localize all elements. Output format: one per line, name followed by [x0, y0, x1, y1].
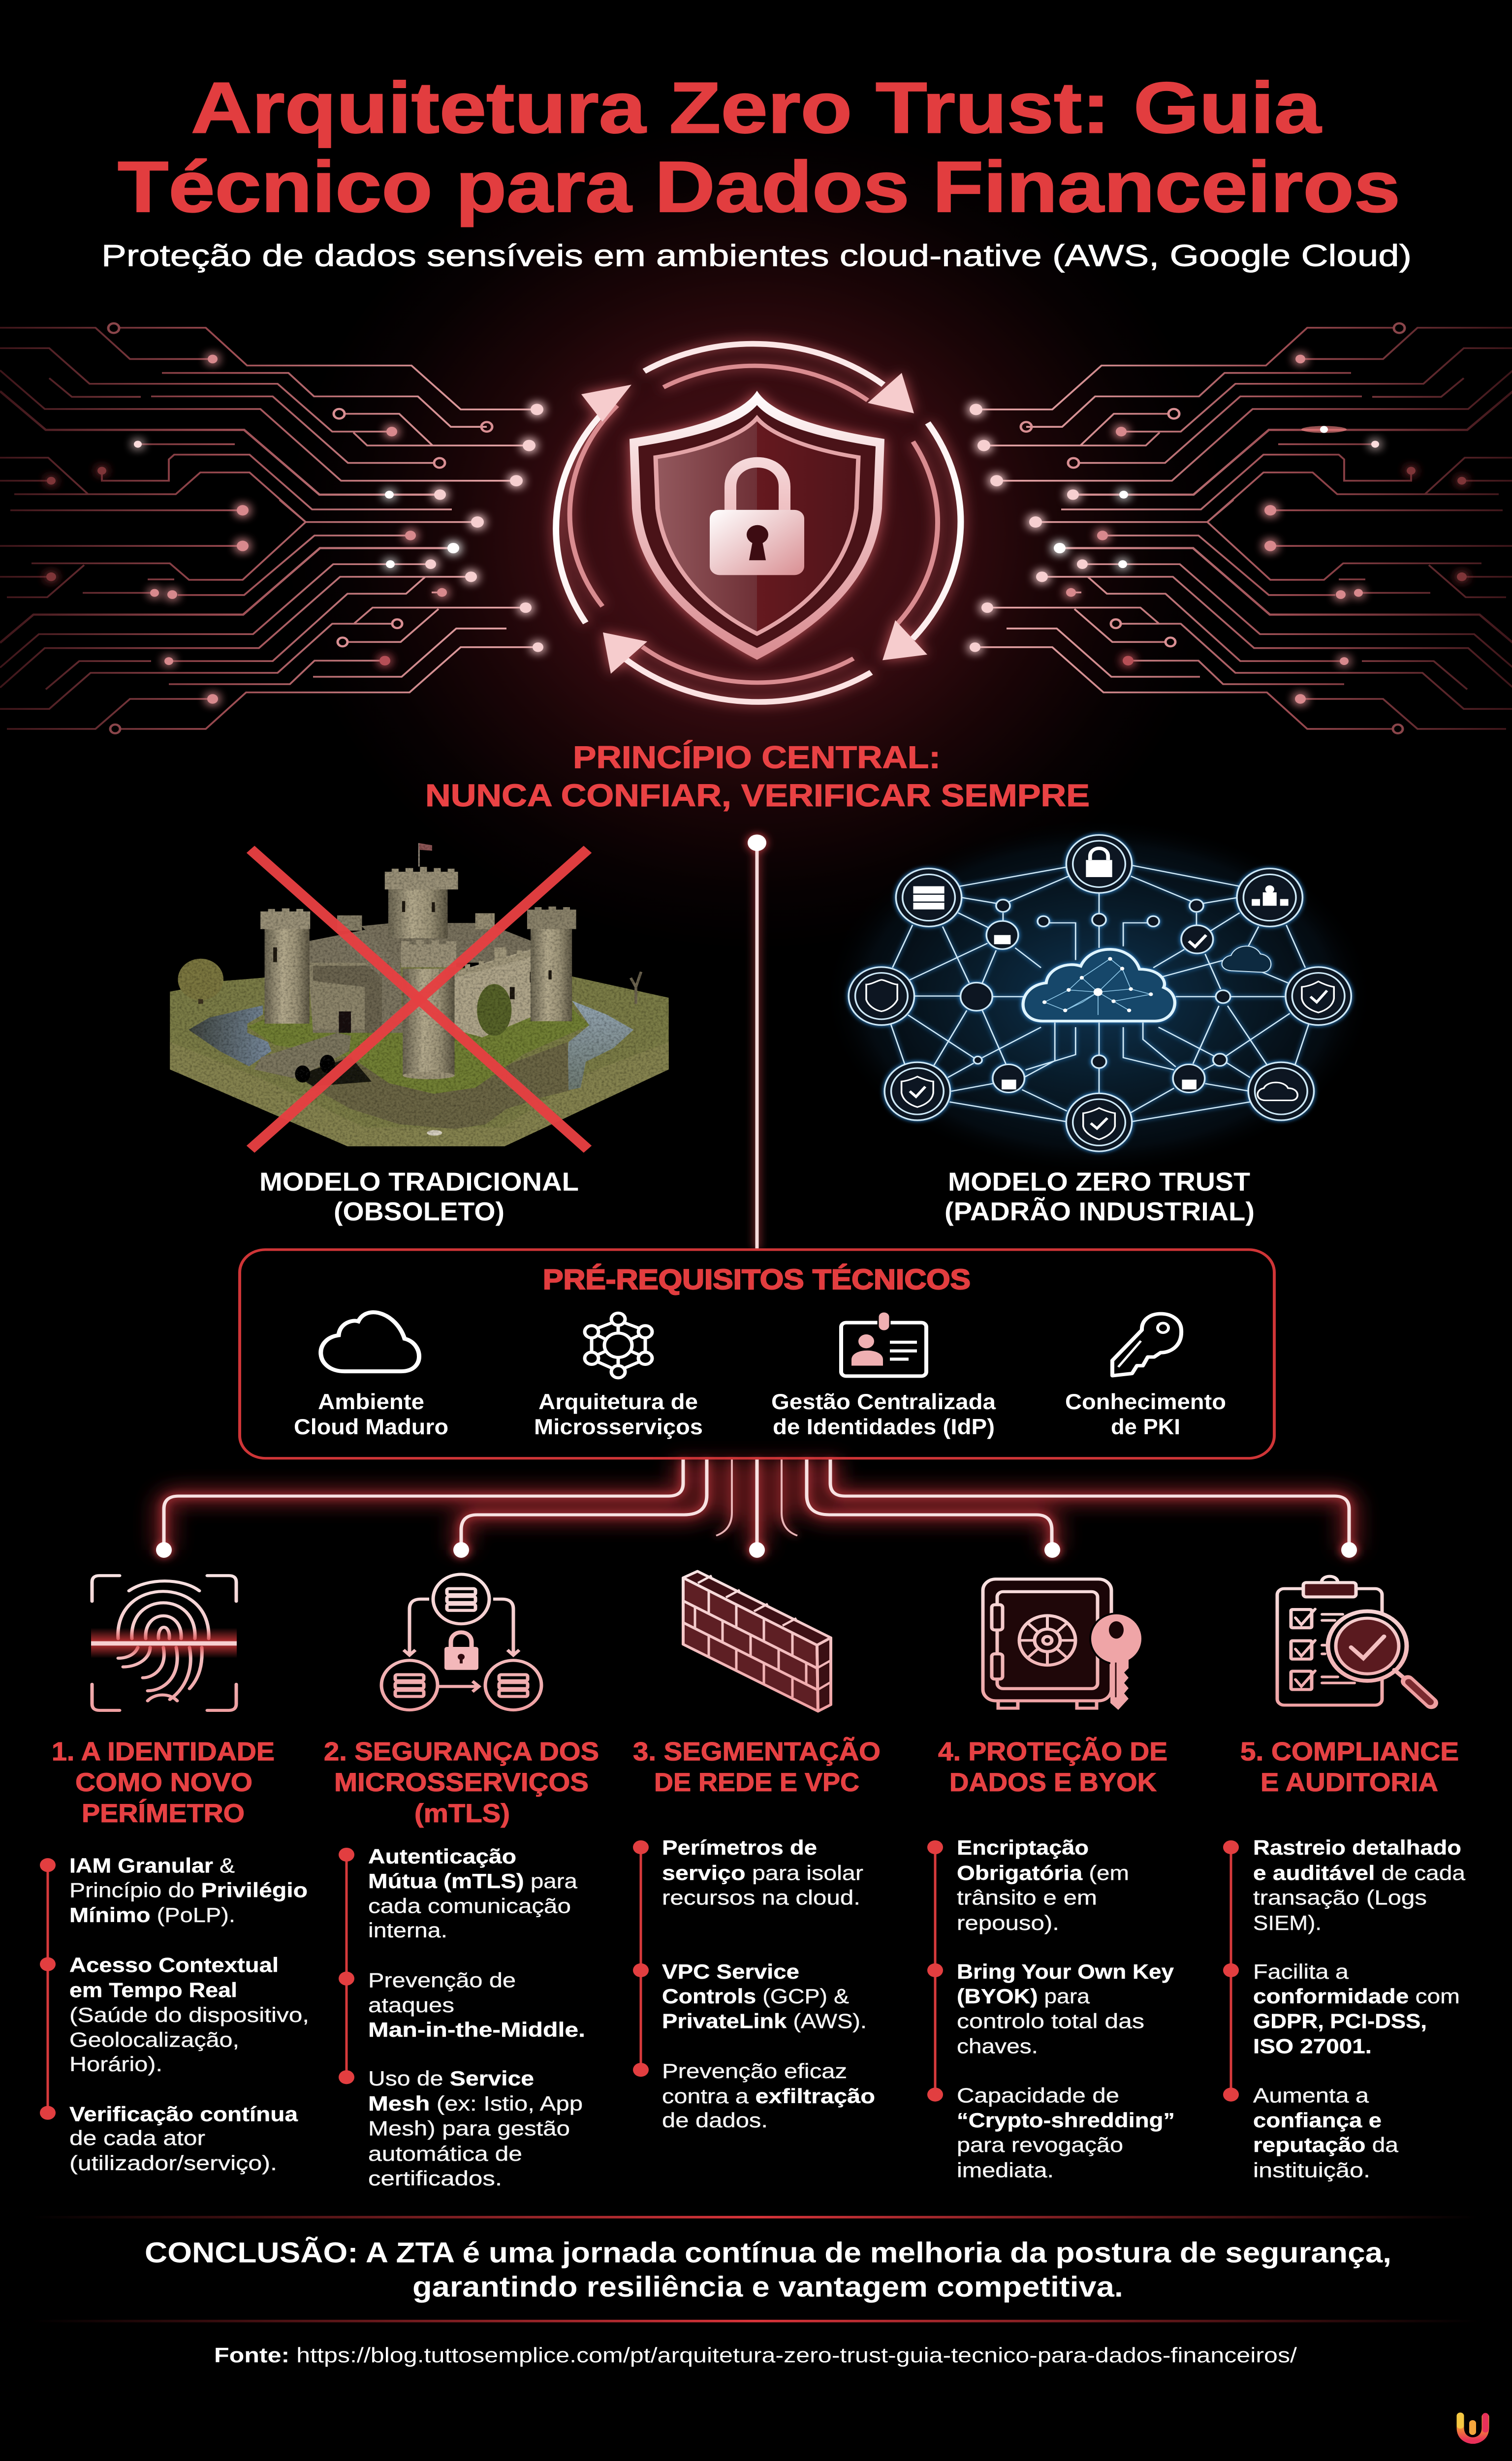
- central principle: PRINCÍPIO CENTRAL:: [573, 740, 941, 775]
- bullet text: [368, 1845, 585, 2190]
- bullet text: Uso de Service: [368, 2068, 534, 2090]
- bullet text: ataques: [368, 1994, 454, 2017]
- heading: [938, 1737, 1167, 1797]
- bullet text: Encriptação: [957, 1837, 1089, 1859]
- bullet text: para revogação: [957, 2134, 1123, 2156]
- red cross: [251, 850, 588, 1149]
- central principle: NUNCA CONFIAR, VERIFICAR SEMPRE: [425, 779, 1090, 813]
- icon: safe and key: [983, 1579, 1142, 1710]
- bullet text: contra a exfiltração: [662, 2085, 875, 2108]
- big nodes: [849, 835, 1351, 1151]
- bullet text: imediata.: [957, 2159, 1054, 2182]
- label: zero trust model: MODELO ZERO TRUST: [948, 1167, 1250, 1196]
- heading: COMO NOVO: [75, 1767, 252, 1797]
- bullet text: Man-in-the-Middle.: [368, 2019, 585, 2041]
- item: PKI knowledge: Conhecimento: [1065, 1389, 1226, 1414]
- bullet text: trânsito e em: [957, 1887, 1097, 1909]
- item: identity management: de Identidades (IdP): [773, 1415, 995, 1439]
- bullet text: PrivateLink (AWS).: [662, 2010, 867, 2033]
- bullet text: interna.: [368, 1919, 447, 1942]
- bullet text: controlo total das: [957, 2010, 1144, 2033]
- subtitle: Proteção de dados sensíveis em ambientes cloud-native (AWS, Google Cloud): [101, 238, 1412, 273]
- heading: [52, 1737, 275, 1828]
- heading: [633, 1737, 881, 1797]
- central shield with rotating arrows: [556, 344, 961, 702]
- bullet text: (utilizador/serviço).: [69, 2152, 277, 2175]
- icon: fingerprint scan: [91, 1576, 237, 1710]
- bullet text: Acesso Contextual: [69, 1954, 279, 1977]
- conclusion: CONCLUSÃO: A ZTA é uma jornada contínua de melhoria da postura de segurança,: [145, 2236, 1391, 2269]
- refresh rings: [556, 344, 961, 702]
- conclusion: garantindo resiliência e vantagem competitiva.: [412, 2272, 1123, 2303]
- bullet text: Mesh) para gestão: [368, 2117, 570, 2140]
- bullet text: Princípio do Privilégio: [69, 1879, 308, 1902]
- padlock: [710, 462, 804, 575]
- icon: lock top: [1086, 849, 1112, 877]
- bullet text: ISO 27001.: [1253, 2035, 1372, 2058]
- item: identity management: Gestão Centralizada: [771, 1389, 996, 1414]
- source: Fonte: https://blog.tuttosemplice.com/pt/arquitetura-zero-trust-guia-tecnico-para-dados-financeiros/: [214, 2343, 1297, 2367]
- logo: [1460, 2416, 1485, 2440]
- bullet text: reputação da: [1253, 2134, 1398, 2156]
- bullet text: Verificação contínua: [69, 2103, 298, 2126]
- title: Arquitetura Zero Trust: Guia: [191, 67, 1322, 148]
- bullet text: VPC Service: [662, 1960, 799, 1983]
- bullet text: Autenticação: [368, 1845, 516, 1868]
- heading: DE REDE E VPC: [654, 1767, 859, 1797]
- icon: mTLS servers: [381, 1575, 541, 1710]
- bullet text: Mútua (mTLS) para: [368, 1870, 577, 1893]
- traditional castle model: [170, 843, 669, 1226]
- heading: E AUDITORIA: [1260, 1767, 1438, 1797]
- item: PKI knowledge: de PKI: [1111, 1415, 1180, 1439]
- item: PKI knowledge: [1065, 1314, 1226, 1439]
- icon: clipboard and magnifier: [1277, 1577, 1431, 1705]
- bullet text: Rastreio detalhado: [1253, 1837, 1461, 1859]
- heading: DADOS E BYOK: [949, 1767, 1157, 1797]
- pillar 4: data protection: [927, 1579, 1175, 2182]
- bullet text: Facilita a: [1253, 1960, 1349, 1983]
- bullet text: cada comunicação: [368, 1895, 571, 1918]
- pillar 2: microservices mTLS: [324, 1575, 599, 2190]
- bullet text: serviço para isolar: [662, 1862, 863, 1885]
- heading: (mTLS): [414, 1798, 510, 1828]
- bullet text: (BYOK) para: [957, 1986, 1090, 2008]
- bullet text: recursos na cloud.: [662, 1887, 860, 1909]
- bullet text: Prevenção eficaz: [662, 2060, 847, 2082]
- bullet timeline: [927, 1840, 943, 2102]
- item: identity management: [771, 1312, 996, 1439]
- bullet text: conformidade com: [1253, 1986, 1460, 2008]
- bullet text: e auditável de cada: [1253, 1862, 1465, 1885]
- bullet timeline: [1223, 1840, 1239, 2102]
- item: cloud environment: Ambiente: [318, 1389, 424, 1414]
- bullet text: Controls (GCP) &: [662, 1986, 849, 2008]
- heading: prerequisites: PRÉ-REQUISITOS TÉCNICOS: [543, 1263, 971, 1295]
- bullet text: confiança e: [1253, 2109, 1382, 2132]
- icon: cloud network: [849, 835, 1351, 1151]
- bullet text: “Crypto-shredding”: [957, 2109, 1175, 2132]
- central principle: [425, 740, 1090, 813]
- item: microservices: Arquitetura de: [538, 1389, 698, 1414]
- icon: castle with moat: [170, 843, 669, 1146]
- bullet timeline: [633, 1840, 649, 2077]
- circuit board left: [0, 323, 543, 733]
- bullet text: instituição.: [1253, 2159, 1370, 2182]
- small cloud: [1222, 946, 1271, 972]
- zero trust network model: [823, 818, 1374, 1226]
- heading: MICROSSERVIÇOS: [334, 1767, 589, 1797]
- title: [118, 67, 1400, 227]
- network glow: [823, 818, 1374, 1174]
- bullet text: de cada ator: [69, 2127, 205, 2149]
- heading: 4. PROTEÇÃO DE: [938, 1737, 1167, 1766]
- bullet text: (Saúde do dispositivo,: [69, 2004, 309, 2026]
- connectors from prerequisites to pillars: [156, 1459, 1357, 1558]
- pillar 3: network segmentation: [633, 1571, 881, 2132]
- bullet text: Geolocalização,: [69, 2029, 239, 2051]
- label: traditional model: (OBSOLETO): [334, 1197, 504, 1226]
- bullet text: certificados.: [368, 2168, 502, 2190]
- background red glow: [197, 109, 1315, 961]
- heading: 2. SEGURANÇA DOS: [324, 1737, 599, 1766]
- pillar 5: compliance: [1223, 1577, 1465, 2182]
- circuit board right: [970, 323, 1512, 733]
- bullet text: Aumenta a: [1253, 2084, 1369, 2107]
- bullet text: IAM Granular &: [69, 1855, 235, 1877]
- bullet text: chaves.: [957, 2035, 1038, 2058]
- icon: brick wall: [683, 1571, 831, 1711]
- bullet text: [1253, 1837, 1465, 2182]
- label: zero trust model: (PADRÃO INDUSTRIAL): [945, 1197, 1255, 1226]
- cloud: [1023, 949, 1175, 1021]
- bullet text: [662, 1837, 875, 2132]
- heading: PERÍMETRO: [82, 1798, 245, 1828]
- panel: technical prerequisites: [240, 1250, 1274, 1458]
- bullet text: Bring Your Own Key: [957, 1960, 1174, 1983]
- bullet text: transação (Logs: [1253, 1887, 1427, 1909]
- label: traditional model: [259, 1167, 579, 1226]
- bullet timeline: [40, 1858, 56, 2120]
- heading: 5. COMPLIANCE: [1240, 1737, 1459, 1766]
- bullet text: repouso).: [957, 1912, 1059, 1934]
- heading: 3. SEGMENTAÇÃO: [633, 1737, 881, 1766]
- label: traditional model: MODELO TRADICIONAL: [259, 1167, 579, 1196]
- pillar 1: identity: [40, 1576, 309, 2175]
- bullet text: automática de: [368, 2143, 522, 2165]
- bullet text: Perímetros de: [662, 1837, 817, 1859]
- bullet text: em Tempo Real: [69, 1979, 237, 2002]
- bullet text: [957, 1837, 1175, 2182]
- item: microservices: [534, 1313, 703, 1439]
- bullet text: [69, 1855, 309, 2175]
- item: microservices: Microsserviços: [534, 1415, 703, 1439]
- shield body: [630, 391, 884, 660]
- bullet text: Obrigatória (em: [957, 1862, 1129, 1885]
- circuit flare: [1301, 426, 1347, 433]
- heading: [1240, 1737, 1459, 1797]
- item: cloud environment: Cloud Maduro: [294, 1415, 448, 1439]
- heading: [324, 1737, 599, 1828]
- heading: 1. A IDENTIDADE: [52, 1737, 275, 1766]
- vertical connector: [748, 835, 766, 1249]
- bullet text: Mesh (ex: Istio, App: [368, 2093, 583, 2115]
- bullet timeline: [339, 1848, 354, 2084]
- title: Técnico para Dados Financeiros: [118, 147, 1400, 227]
- connector glow: [164, 1459, 1349, 1550]
- bullet text: Capacidade de: [957, 2084, 1119, 2107]
- bullet text: Mínimo (PoLP).: [69, 1904, 235, 1926]
- item: cloud environment: [294, 1312, 448, 1439]
- bullet text: Horário).: [69, 2053, 162, 2076]
- bullet text: de dados.: [662, 2109, 768, 2132]
- bullet text: GDPR, PCI-DSS,: [1253, 2010, 1427, 2033]
- bullet text: SIEM).: [1253, 1912, 1322, 1934]
- label: zero trust model: [945, 1167, 1255, 1226]
- conclusion: [145, 2236, 1391, 2303]
- bullet text: Prevenção de: [368, 1969, 516, 1992]
